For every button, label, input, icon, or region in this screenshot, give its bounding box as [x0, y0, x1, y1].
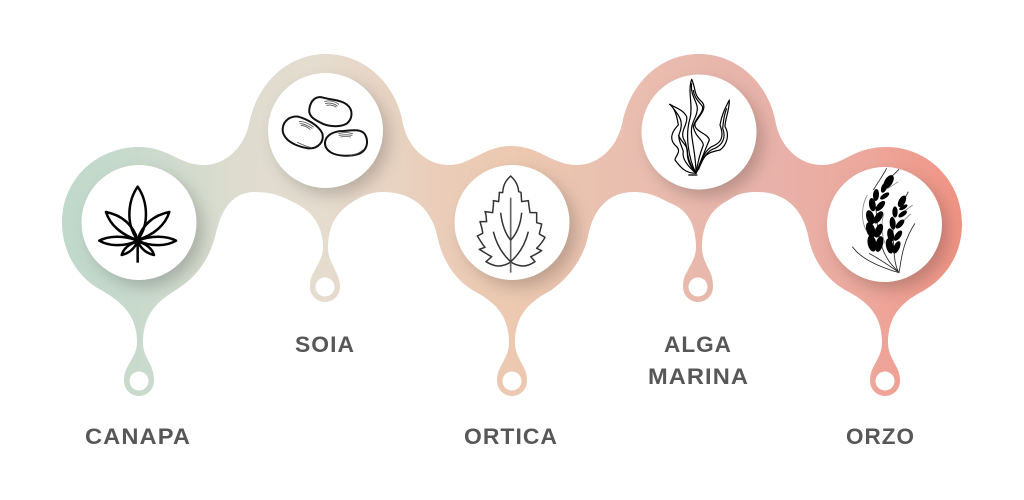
label: alga marina: ALGA	[664, 332, 732, 357]
white circle: soia	[268, 73, 383, 188]
white circle: alga marina	[642, 74, 756, 190]
icon: nettle leaf	[477, 176, 545, 273]
label: soia: SOIA	[295, 332, 355, 357]
label: alga marina: MARINA	[648, 364, 749, 389]
white circle: orzo	[827, 167, 942, 282]
icon: seaweed	[669, 79, 729, 175]
white circle: ortica	[454, 165, 570, 280]
circle shadows clipped to ribbon	[89, 81, 948, 289]
white circle: canapa	[82, 165, 196, 280]
icon: soy beans	[283, 97, 367, 156]
label: ortica: ORTICA	[464, 424, 558, 449]
label: orzo: ORZO	[846, 424, 915, 449]
label: canapa: CANAPA	[85, 424, 191, 449]
label: alga marina	[648, 332, 749, 389]
icon: hemp leaf	[99, 187, 176, 263]
gradient ribbon with five drops	[62, 54, 962, 396]
icon: barley	[852, 168, 915, 273]
infographic	[62, 54, 962, 444]
